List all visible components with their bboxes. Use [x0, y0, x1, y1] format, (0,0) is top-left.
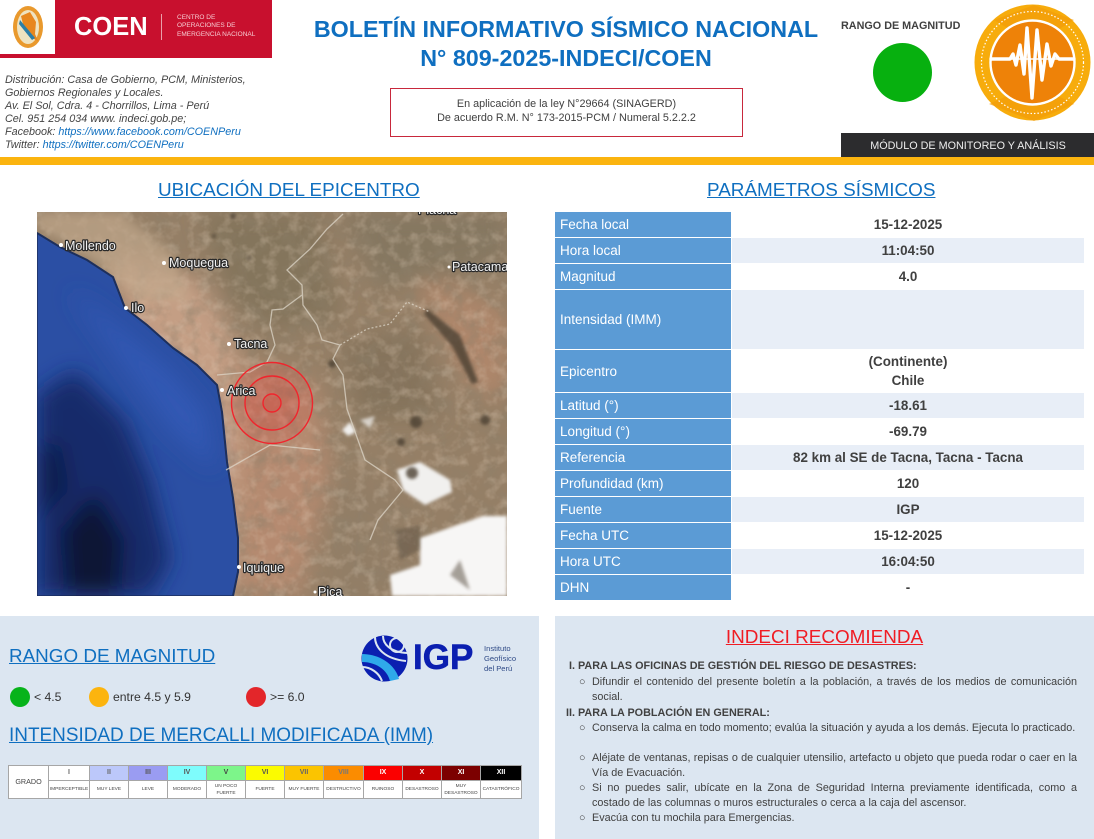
- text: LEVE: [142, 787, 154, 792]
- map labels: [65, 203, 508, 599]
- parameters table: 82 km al SE de Tacna, Tacna - Tacna: [793, 450, 1023, 465]
- parameters table: 16:04:50: [881, 554, 935, 569]
- Mercalli degree XII: XII: [497, 769, 505, 776]
- yellow divider band: [0, 157, 1094, 165]
- coast redraw: [37, 233, 238, 596]
- legal notice box: [390, 88, 743, 137]
- Mercalli degree VII: [285, 766, 324, 781]
- Mercalli degree I: [49, 766, 90, 781]
- section II item 2: [579, 752, 1077, 779]
- map: epicenter: [37, 212, 507, 596]
- title: BOLETÍN INFORMATIVO SÍSMICO NACIONAL: [314, 16, 818, 42]
- ocean: [37, 233, 238, 596]
- parameters table: Referencia: [560, 450, 625, 465]
- parameters table: Fecha local: [560, 217, 629, 232]
- red range: >= 6.0: [270, 690, 305, 704]
- text: MUY FUERTE: [288, 787, 320, 792]
- red range: [246, 687, 305, 707]
- parameters table: IGP: [896, 502, 920, 517]
- section II item 2: Aléjate de ventanas, repisas o de cualquier utensilio, artefacto u objeto que pueda rodar o caer en la: [592, 752, 1077, 764]
- Mercalli degree VI: [246, 766, 285, 781]
- IGP institute name: Geofísico: [484, 654, 516, 663]
- Mercalli degree VII: VII: [300, 769, 308, 776]
- Mercalli degree I: I: [68, 769, 70, 776]
- map labels: Iquique: [243, 561, 284, 575]
- logo: COEN emblem: [0, 0, 55, 54]
- module banner: MÓDULO DE MONITOREO Y ANÁLISIS: [870, 140, 1066, 152]
- parameters table: 120: [897, 476, 919, 491]
- map labels: Moquegua: [169, 256, 228, 270]
- Mercalli degree XI: XI: [458, 769, 464, 776]
- parameters table: Hora local: [560, 243, 621, 258]
- Mercalli degree XI: [442, 766, 481, 781]
- legend: magnitude ranges: [10, 687, 305, 707]
- Mercalli degree XII: [481, 766, 521, 781]
- section I heading: I. PARA LAS OFICINAS DE GESTIÓN DEL RIESGO DE DESASTRES:: [569, 660, 917, 672]
- distribution text block: Facebook: https://www.facebook.com/COENPeru: [5, 126, 241, 138]
- module banner: [841, 133, 1094, 157]
- heading: magnitude range: RANGO DE MAGNITUD: [9, 645, 215, 666]
- parameters table: 15-12-2025: [874, 528, 942, 543]
- logo subtitle: CENTRO DE: [177, 14, 215, 21]
- map labels: Patacama: [452, 260, 507, 274]
- magnitude range label: RANGO DE MAGNITUD: [841, 20, 960, 32]
- text: IMPERCEPTIBLE: [50, 787, 88, 792]
- map labels: Ilo: [131, 301, 144, 315]
- text: FUERTE: [216, 790, 236, 796]
- yellow range: [89, 687, 191, 707]
- Mercalli degree X: [403, 766, 442, 781]
- panel: INDECI recommendations: [555, 616, 1094, 839]
- Mercalli degree V: V: [224, 769, 228, 776]
- Mercalli degree IV: IV: [184, 769, 190, 776]
- parameters table: -: [906, 580, 910, 595]
- roads: [217, 214, 430, 540]
- Mercalli degree II: [90, 766, 129, 781]
- coastal land: [37, 212, 190, 300]
- map labels: Tacna: [234, 337, 267, 351]
- title: [314, 16, 818, 71]
- Mercalli degree VI: VI: [262, 769, 268, 776]
- section II item 2: Vía de Evacuación.: [592, 767, 685, 779]
- section II item 3: Si no puedes salir, ubícate en la Zona de Seguridad Interna previamente identificada, como a: [592, 782, 1077, 794]
- section I item: social.: [592, 691, 623, 703]
- parameters table: -18.61: [889, 398, 927, 413]
- panel: INDECI recommendations: ○: [579, 722, 586, 734]
- distribution text block: Distribución: Casa de Gobierno, PCM, Ministerios,: [5, 74, 246, 86]
- logo: IGP: [362, 636, 516, 682]
- distribution text block: Twitter: https://twitter.com/COENPeru: [5, 139, 184, 151]
- section II item 1: Conserva la calma en todo momento; evalúa la situación y ayuda a los demás. Ejecuta lo practicado.: [592, 722, 1075, 734]
- legal notice box: De acuerdo R.M. N° 173-2015-PCM / Numeral 5.2.2.2: [437, 112, 696, 124]
- section I item: Difundir el contenido del presente boletín a la población, a través de los medios de comunicación: [592, 676, 1077, 688]
- parameters table: DHN: [560, 580, 589, 595]
- section II item 3: [579, 782, 1077, 809]
- Mercalli degree X: X: [420, 769, 424, 776]
- IGP institute name: [484, 644, 516, 673]
- section II item 3: costado de las columnas o muros estructurales o cerca a la caja del ascensor.: [592, 797, 966, 809]
- logo wordmark: COEN: [74, 13, 148, 41]
- Mercalli degree II: II: [107, 769, 111, 776]
- Mercalli scale table: [8, 765, 522, 799]
- Mercalli degree IX: [364, 766, 403, 781]
- text: RUINOSO: [372, 787, 394, 792]
- parameters table: Fuente: [560, 502, 602, 517]
- Mercalli degree IX: IX: [380, 769, 386, 776]
- Mercalli scale table: GRADO: [15, 777, 42, 786]
- epicenter rings: [232, 362, 312, 444]
- parameters table: Fecha UTC: [560, 528, 629, 543]
- salt flats: [342, 416, 507, 596]
- panel: INDECI recommendations: ○: [579, 812, 586, 824]
- logo subtitle: EMERGENCIA NACIONAL: [177, 31, 255, 38]
- panel: INDECI recommendations: ○: [579, 782, 586, 794]
- distribution text block: [4, 74, 246, 151]
- magnitude indicator: green circle: [873, 43, 932, 102]
- text: DESTRUCTIVO: [326, 787, 361, 792]
- heading: Mercalli intensity: INTENSIDAD DE MERCALLI MODIFICADA (IMM): [9, 725, 433, 746]
- text: MUY: [456, 784, 466, 788]
- green range: < 4.5: [34, 690, 61, 704]
- IGP institute name: Instituto: [484, 644, 511, 653]
- map labels: Mollendo: [65, 239, 116, 253]
- Mercalli degree VIII: [324, 766, 364, 781]
- panel: INDECI recommendations: ○: [579, 752, 586, 764]
- section II item 4: Evacúa con tu mochila para Emergencias.: [592, 812, 795, 824]
- green range: [10, 687, 61, 707]
- title: N° 809-2025-INDECI/COEN: [420, 45, 712, 71]
- distribution text block: Cel. 951 254 034 www. indeci.gob.pe;: [5, 113, 186, 125]
- Mercalli degree V: [207, 766, 246, 781]
- IGP globe icon: [362, 636, 408, 682]
- heading: epicenter location: UBICACIÓN DEL EPICENTRO: [158, 180, 420, 201]
- yellow range: entre 4.5 y 5.9: [113, 690, 191, 704]
- parameters table: Latitud (°): [560, 398, 619, 413]
- map labels: Arica: [227, 384, 256, 398]
- text: MUY LEVE: [97, 787, 121, 792]
- panel: magnitude range and Mercalli scale: [0, 616, 539, 839]
- parameters table: Intensidad (IMM): [560, 312, 661, 327]
- logo subtitle: [177, 14, 256, 38]
- distribution text block: Av. El Sol, Cdra. 4 - Chorrillos, Lima - Perú: [5, 100, 209, 112]
- header: COEN logo banner: [0, 0, 272, 58]
- parameters table: [555, 212, 1084, 600]
- parameters table: Hora UTC: [560, 554, 621, 569]
- text: CATASTRÓFICO: [483, 787, 519, 792]
- parameters table: -69.79: [889, 424, 927, 439]
- parameters table: Epicentro: [560, 364, 617, 378]
- Mercalli degree III: [129, 766, 168, 781]
- IGP institute name: del Perú: [484, 664, 512, 673]
- Mercalli degree VIII: VIII: [338, 769, 349, 776]
- IGP wordmark: IGP: [413, 638, 473, 677]
- heading: recommendations: INDECI RECOMIENDA: [726, 627, 923, 648]
- text: DESASTROSO: [444, 790, 478, 796]
- parameters table: (Continente): [869, 354, 947, 369]
- parameters table: Chile: [892, 373, 924, 388]
- text: FUERTE: [255, 787, 275, 792]
- heading: seismic parameters: PARÁMETROS SÍSMICOS: [707, 180, 935, 201]
- text: DESASTROSO: [405, 787, 439, 792]
- parameters table: Magnitud: [560, 269, 616, 284]
- Mercalli degree IV: [168, 766, 207, 781]
- text: UN POCO: [215, 784, 237, 788]
- panel: INDECI recommendations: ○: [579, 676, 586, 688]
- logo divider: [161, 14, 162, 40]
- section II heading: II. PARA LA POBLACIÓN EN GENERAL:: [566, 707, 770, 719]
- logo subtitle: OPERACIONES DE: [177, 22, 236, 29]
- legal notice box: En aplicación de la ley N°29664 (SINAGERD): [457, 98, 676, 110]
- section I item: [579, 676, 1077, 703]
- parameters table: 15-12-2025: [874, 217, 942, 232]
- icon: seismic wave badge: [974, 4, 1090, 121]
- parameters table: Profundidad (km): [560, 476, 664, 491]
- distribution text block: Gobiernos Regionales y Locales.: [5, 87, 163, 99]
- parameters table: Longitud (°): [560, 424, 630, 439]
- text: MODERADO: [173, 787, 201, 792]
- Mercalli degree III: III: [145, 769, 151, 776]
- parameters table: 4.0: [899, 269, 917, 284]
- parameters table: 11:04:50: [882, 243, 934, 258]
